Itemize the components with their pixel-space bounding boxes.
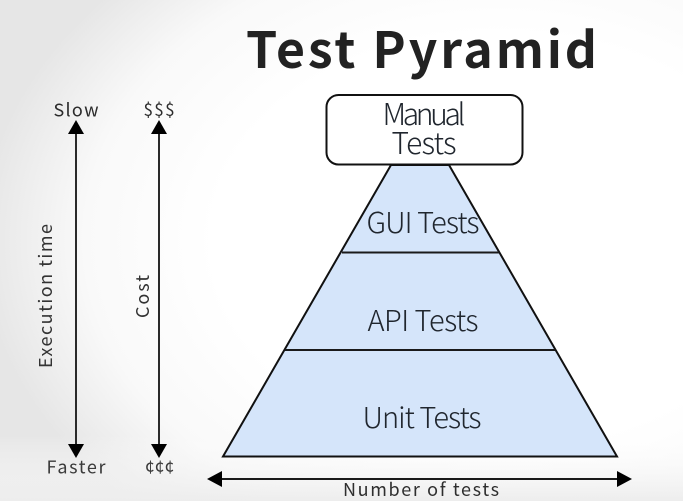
label: slow: Slow <box>54 96 98 122</box>
title: Test Pyramid <box>246 11 597 83</box>
arrow: execution time <box>68 120 84 458</box>
layer label: unit tests: Unit Tests <box>362 395 482 437</box>
divider: gui and api <box>342 252 499 254</box>
arrow: number of tests <box>207 471 632 487</box>
layer label: gui tests: GUI Tests <box>366 200 480 242</box>
label: execution time: Execution time <box>32 224 58 368</box>
label: cheap: ¢¢¢ <box>145 453 174 478</box>
label: expensive: $$$ <box>144 96 174 121</box>
layer label: api tests: API Tests <box>368 298 478 340</box>
manual tests box <box>326 90 522 164</box>
label: number of tests: Number of tests <box>343 476 499 502</box>
manual tests box: Manual <box>382 90 466 134</box>
label: faster: Faster <box>46 454 107 480</box>
arrow: cost <box>151 120 167 458</box>
label: cost: Cost <box>129 275 155 318</box>
pyramid <box>223 165 617 456</box>
divider: api and unit <box>285 349 555 351</box>
pyramid body <box>223 165 617 456</box>
manual tests box: Tests <box>392 119 456 163</box>
